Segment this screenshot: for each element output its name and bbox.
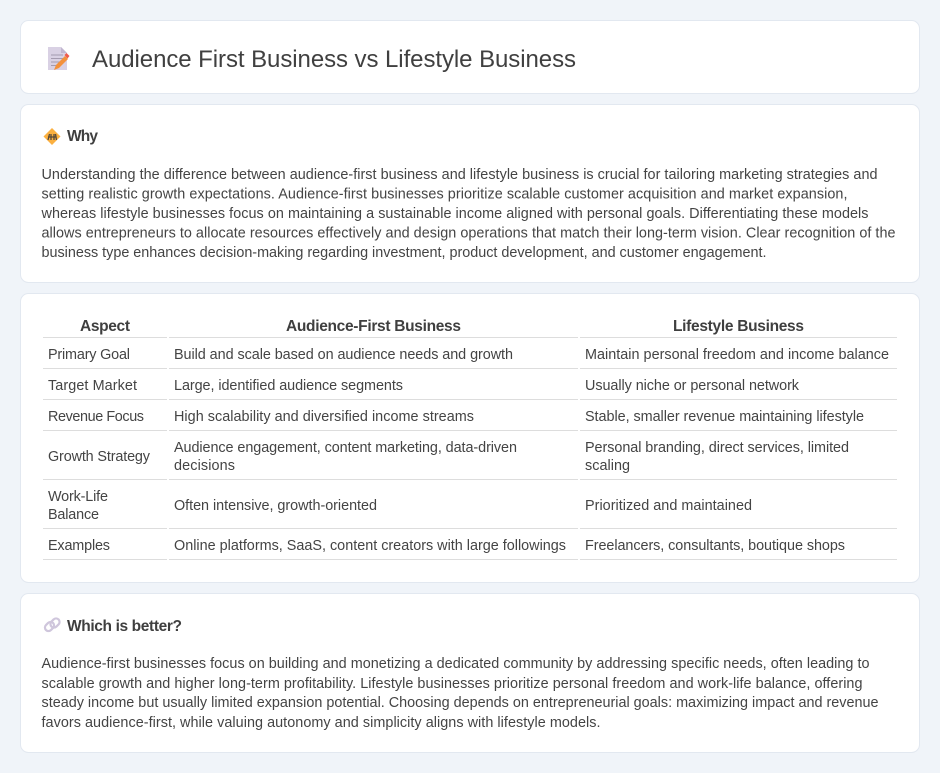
table row: target market: Large, identified audience segments xyxy=(174,378,403,394)
table row: work-life balance: Work-Life xyxy=(48,489,108,505)
icon: orange diamond sign xyxy=(44,128,60,145)
text block: why paragraph: business type enhances decision-making regarding investment, product development, and customer engagement. xyxy=(42,245,766,261)
title: Audience First Business vs Lifestyle Business xyxy=(92,46,576,73)
table row: primary goal: Primary Goal xyxy=(48,347,130,363)
table header row xyxy=(80,318,804,335)
table row: primary goal: Maintain personal freedom and income balance xyxy=(585,347,889,363)
table row: growth strategy: Audience engagement, content marketing, data-driven xyxy=(174,440,517,456)
panel: comparison table xyxy=(20,294,920,582)
table row: target market xyxy=(48,378,800,394)
table row: growth strategy: decisions xyxy=(174,458,235,474)
table row: primary goal xyxy=(48,347,889,363)
table header row: Audience-First Business xyxy=(286,318,461,335)
table row: examples: Online platforms, SaaS, content creators with large followings xyxy=(174,538,566,554)
table row: revenue focus: Stable, smaller revenue maintaining lifestyle xyxy=(585,409,864,425)
text block: why paragraph: Understanding the difference between audience-first business and lifestyle business is crucial for tailoring marketing strategies and xyxy=(42,167,878,183)
table row: work-life balance: Balance xyxy=(48,507,99,523)
panel: why xyxy=(20,104,920,282)
table row: primary goal: Build and scale based on audience needs and growth xyxy=(174,347,513,363)
table header row: Aspect xyxy=(80,318,130,335)
text block: why paragraph: setting realistic growth expectations. Audience-first businesses prioritize scalable customer acquisition and market expansion, xyxy=(42,186,848,202)
table row: examples: Freelancers, consultants, boutique shops xyxy=(585,538,845,554)
table row: revenue focus: High scalability and diversified income streams xyxy=(174,409,474,425)
text block: which is better paragraph: Audience-first businesses focus on building and monetizing a dedicated community by addressing specific needs, often leading to xyxy=(42,656,870,672)
table row: work-life balance: Prioritized and maintained xyxy=(585,498,752,514)
heading: which is better: Which is better? xyxy=(67,618,182,635)
table row: growth strategy: Growth Strategy xyxy=(48,449,151,465)
icon: chain link xyxy=(43,617,61,633)
table row: examples xyxy=(48,538,845,554)
table row: work-life balance xyxy=(48,489,752,523)
table row: target market: Target Market xyxy=(48,378,137,394)
panel: which is better xyxy=(20,594,920,752)
text block: why paragraph: allows entrepreneurs to allocate resources effectively and design operations that match their long-term vision. Clear recognition of the xyxy=(42,226,896,242)
table row: examples: Examples xyxy=(48,538,110,554)
table row: work-life balance: Often intensive, growth-oriented xyxy=(174,498,377,514)
table row: revenue focus xyxy=(48,409,864,425)
table row: growth strategy xyxy=(48,440,849,474)
table row: revenue focus: Revenue Focus xyxy=(48,409,144,425)
text block: why paragraph: whereas lifestyle businesses focus on maintaining a sustainable income aligned with personal goals. Differentiating these models xyxy=(40,206,868,222)
heading: why: Why xyxy=(67,128,98,145)
table row: growth strategy: Personal branding, direct services, limited xyxy=(585,440,849,456)
text block: why paragraph xyxy=(40,167,896,261)
icon: document with pencil xyxy=(48,47,70,70)
table header row: Lifestyle Business xyxy=(673,318,804,335)
text block: which is better paragraph: favors audience-first, while valuing autonomy and simplicity aligns with lifestyle models. xyxy=(42,715,600,731)
table row: target market: Usually niche or personal network xyxy=(585,378,800,394)
text block: which is better paragraph xyxy=(42,656,878,731)
table row: growth strategy: scaling xyxy=(585,458,630,474)
text block: which is better paragraph: scalable growth and higher long-term profitability. Lifestyle businesses prioritize personal freedom and work-life balance, offering xyxy=(42,676,862,692)
panel: title header xyxy=(20,20,920,94)
text block: which is better paragraph: steady income but usually limited expansion potential. Choosing depends on entrepreneurial goals: maximizing impact and revenue xyxy=(42,695,878,711)
